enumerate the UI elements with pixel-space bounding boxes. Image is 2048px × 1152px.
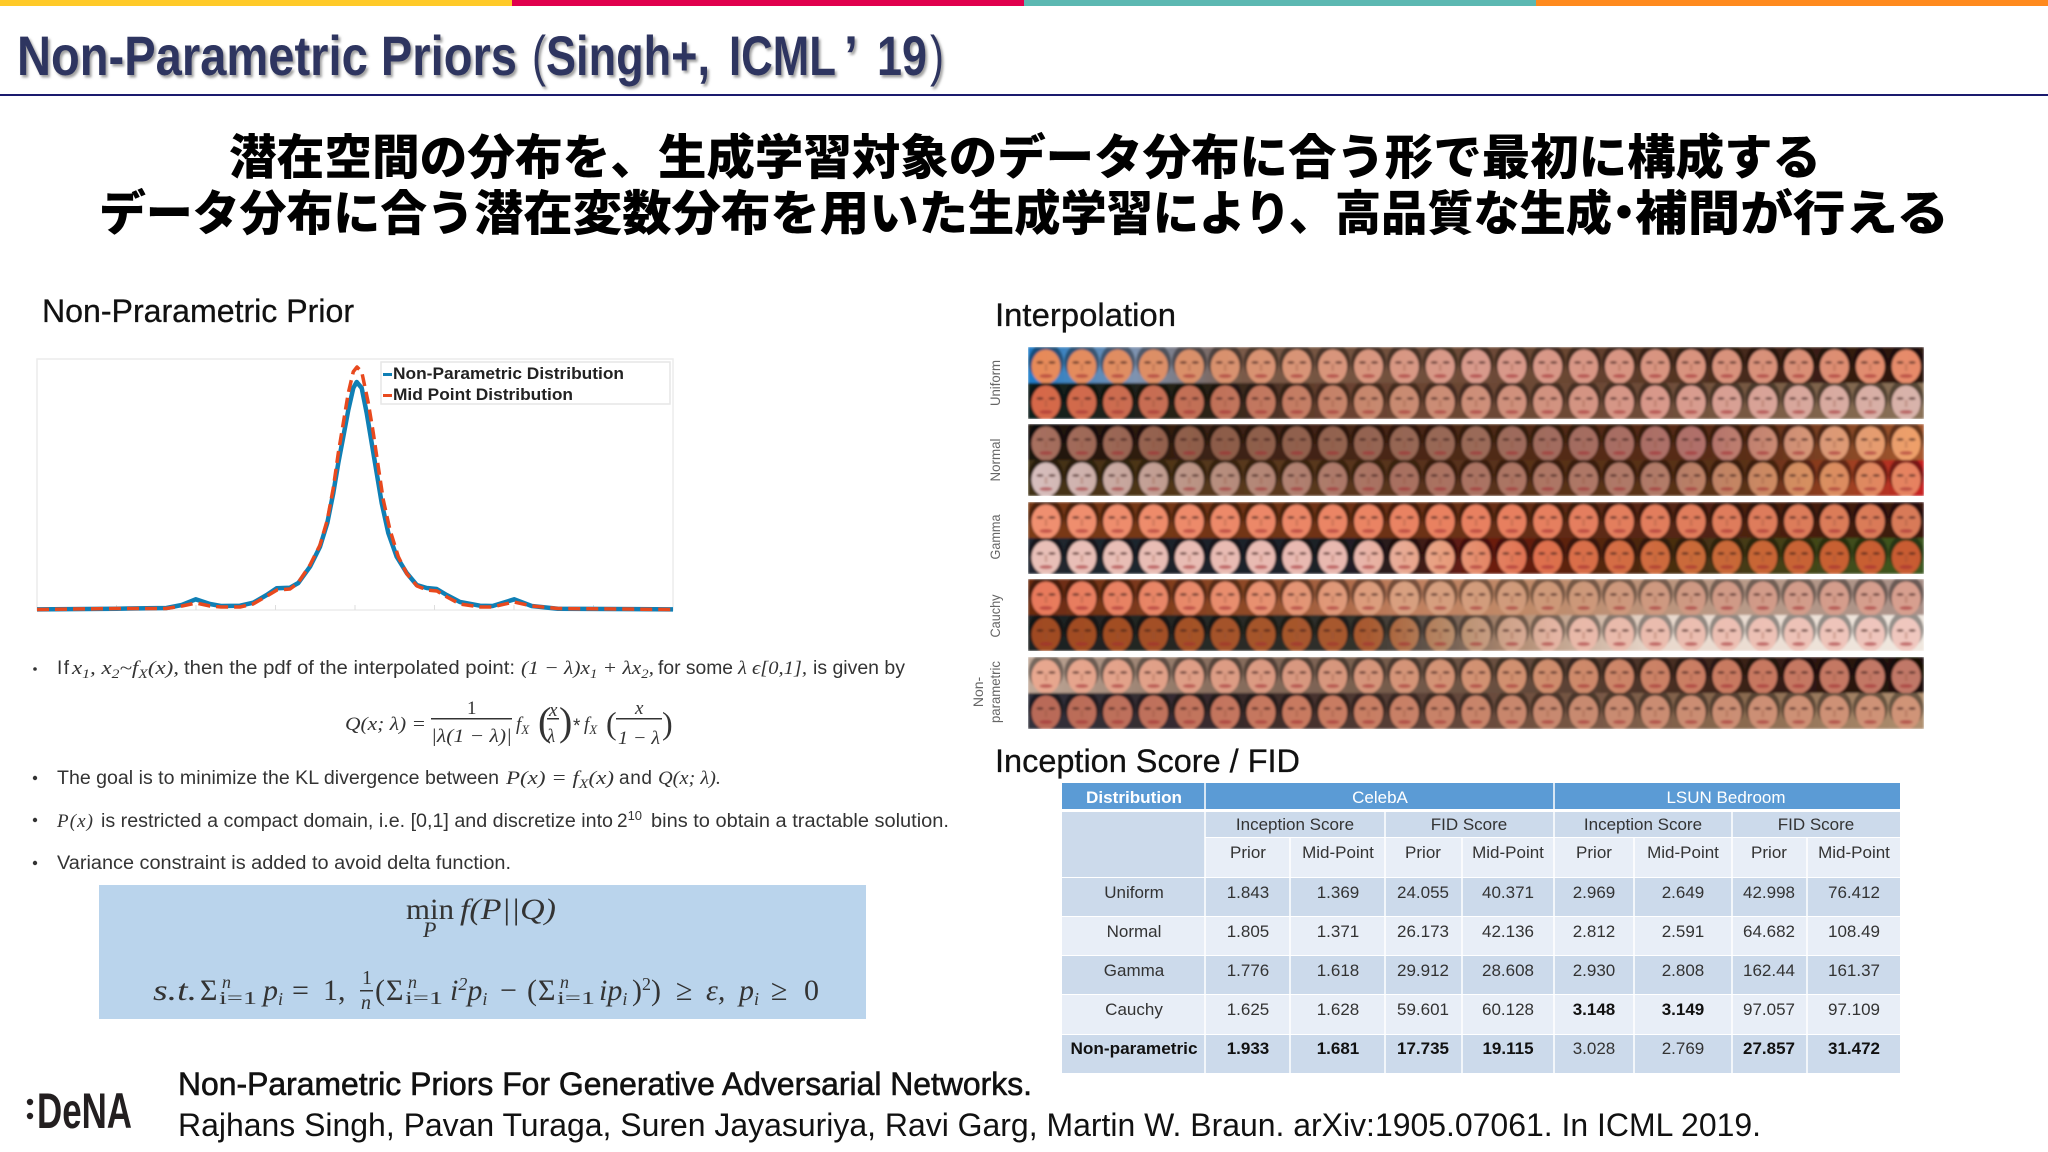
row: cauchy: 59.601 [1397,1000,1449,1019]
logo: DeNA: DeNA [37,1083,132,1139]
column sub-headers: Prior [1576,843,1612,862]
headline message: 生成学習により、 [968,187,1335,241]
bullet 1: ~f [119,658,142,679]
constraints: ip [599,974,622,1007]
headline message [99,131,1949,241]
row: normal: Normal [1107,922,1161,941]
row: normal: 1.371 [1317,922,1359,941]
constraints: ε, [706,974,725,1007]
formula panel: optimisation problem [99,885,866,1019]
column sub-headers: Prior [1751,843,1787,862]
column group headers [1236,815,1854,834]
column sub-headers: Prior [1405,843,1441,862]
top colour bar [0,0,2048,6]
row labels: priors [970,360,1003,723]
bullet 1: is given by [813,658,905,679]
row: gamma [1104,961,1880,980]
bullet list: explanation [33,658,949,874]
bullet 2: (x) [589,768,614,789]
row: gamma: 29.912 [1397,961,1449,980]
bullet 1: 2 [641,666,649,681]
row: normal: 2.591 [1662,922,1704,941]
chart legend: Non-Parametric Distribution [393,364,624,383]
slide title: ICML [729,24,836,87]
table backgrounds [1062,783,1900,1073]
constraints: i [754,989,759,1009]
bullet 3: 10 [628,808,642,823]
column sub-headers: Mid-Point [1472,843,1544,862]
heading: non-parametric prior: Non-Prarametric Prior [42,293,354,329]
bullet 1: then the pdf of the interpolated point: [184,658,515,679]
constraints: − [500,974,517,1007]
objective [406,893,556,942]
row: gamma: 2.930 [1573,961,1615,980]
row: normal [1107,922,1880,941]
row: non-parametric [1070,1039,1880,1058]
row labels: priors: Gamma [987,514,1003,560]
slide title: ( [532,24,546,87]
constraints: ( [527,974,537,1007]
constraints [153,967,819,1014]
slide title: ’ [844,24,858,87]
heading: inception score / FID: Inception Score / FID [995,743,1300,779]
row: normal: 108.49 [1828,922,1880,941]
constraints: n [560,972,569,992]
row: uniform: 1.369 [1317,883,1359,902]
headline message: 高品質な生成 [1335,187,1612,241]
bullet 1: 2 [112,666,120,681]
face strip: uniform [1028,347,1924,419]
constraints: i=1 [557,988,595,1008]
constraints: p [465,974,482,1007]
row labels: priors: Cauchy [987,594,1003,638]
formula: Q(x; lambda): x [548,700,558,721]
row: cauchy [1105,1000,1880,1019]
row: non-parametric: 31.472 [1828,1039,1880,1058]
bullet 2: and [619,768,652,789]
constraints: = [292,974,309,1007]
citation: Rajhans Singh, Pavan Turaga, Suren Jayasuriya, Ravi Garg, Martin W. Braun. arXiv:1905.07061. In ICML 2019. [178,1107,1761,1143]
logo: DeNA [27,1083,132,1139]
bullet 1: (1 − λ)x [521,658,582,679]
constraints: Σ [538,974,555,1007]
table header: CelebA [1352,788,1409,807]
bullet 1: , [649,658,654,679]
bullet 1: + λx [597,658,642,679]
constraints: i [278,989,283,1009]
formula: Q(x; lambda): X [588,722,598,737]
row: gamma: 161.37 [1828,961,1880,980]
formula: Q(x; lambda): ( [606,705,617,741]
row: cauchy: 3.148 [1573,1000,1615,1019]
constraints: ( [375,974,385,1007]
slide title [17,24,944,87]
constraints: Σ [386,974,403,1007]
formula: Q(x; lambda) [345,698,673,749]
constraints: n [361,992,371,1014]
line chart: distributions [37,359,673,610]
slide title: Non-Parametric Priors [17,24,517,87]
bullet 1: , x [90,658,112,679]
row: normal: 42.136 [1482,922,1534,941]
bullet 1: for some [658,658,733,679]
citation [178,1066,1761,1143]
headline message: 潜在空間の分布を、 [229,132,658,185]
curve: non-parametric distribution [37,382,673,609]
bullet 1 [57,658,905,681]
constraints: i=1 [405,988,443,1008]
row: non-parametric: 27.857 [1743,1039,1795,1058]
constraints: 2 [458,974,467,994]
results table [1062,783,1900,1073]
row: uniform: 42.998 [1743,883,1795,902]
bullet 2: Q(x; λ). [658,768,721,789]
constraints: ) [651,974,661,1007]
formula: Q(x; lambda): ) [559,699,572,744]
row: cauchy: Cauchy [1105,1000,1163,1019]
image grid: face interpolation [1028,347,1924,729]
row: uniform: 40.371 [1482,883,1534,902]
headline message: 補間が行える [1635,187,1949,241]
row: gamma: 2.808 [1662,961,1704,980]
row labels: priors: Uniform [987,360,1003,406]
row: cauchy: 60.128 [1482,1000,1534,1019]
row: normal: 64.682 [1743,922,1795,941]
row: uniform: Uniform [1104,883,1164,902]
face strip: normal [1028,424,1924,496]
formula: Q(x; lambda): f [516,714,521,735]
row labels: priors: Non- [970,676,986,707]
face strip: gamma [1028,502,1924,574]
row: non-parametric: 2.769 [1662,1039,1704,1058]
table header [1086,788,1786,807]
row: cauchy: 1.628 [1317,1000,1359,1019]
citation: Non-Parametric Priors For Generative Adversarial Networks. [178,1066,1032,1102]
bullet 1: (x), [148,658,179,679]
bullet 1: X [137,666,149,681]
row: uniform: 24.055 [1397,883,1449,902]
formula: Q(x; lambda): |λ(1 − λ)| [431,726,512,747]
table header: Distribution [1086,788,1182,807]
row: non-parametric: 1.933 [1227,1039,1269,1058]
bullet 4: Variance constraint is added to avoid delta function. [57,853,511,874]
row: cauchy: 97.057 [1743,1000,1795,1019]
table header: LSUN Bedroom [1666,788,1786,807]
row: normal: 1.805 [1227,922,1269,941]
constraints: s.t. [153,974,197,1007]
row: uniform: 2.969 [1573,883,1615,902]
chart legend: Mid Point Distribution [393,385,573,404]
formula: Q(x; lambda): f [584,714,589,735]
formula: Q(x; lambda): 1 − λ [618,728,660,749]
bullet 2: P(x) = f [506,768,566,789]
column sub-headers: Prior [1230,843,1266,862]
row: uniform: 1.843 [1227,883,1269,902]
formula: Q(x; lambda): ) [662,705,673,741]
row: gamma: 162.44 [1743,961,1795,980]
bullet 2: X [578,776,590,791]
row labels: priors: parametric [987,661,1003,723]
face strip: cauchy [1028,579,1924,651]
slide title: 19 [877,24,927,87]
slide title: Singh+, [546,24,710,87]
row: normal: 2.812 [1573,922,1615,941]
bullet 2: The goal is to minimize the KL divergence between [57,768,499,789]
constraints: p [263,974,278,1007]
bullet 3: P(x) [56,811,93,832]
row: gamma: Gamma [1104,961,1165,980]
formula: Q(x; lambda): X [520,722,530,737]
row: uniform: 2.649 [1662,883,1704,902]
formula: Q(x; lambda): λ [546,726,555,747]
row: gamma: 28.608 [1482,961,1534,980]
headline message: 生成学習対象のデータ分布に合う形で最初に構成する [658,131,1821,185]
objective: f(P||Q) [460,893,556,926]
curve: mid point distribution [37,367,673,610]
column sub-headers: Mid-Point [1647,843,1719,862]
formula: Q(x; lambda): x [634,698,644,719]
column sub-headers: Mid-Point [1818,843,1890,862]
row: normal: 26.173 [1397,922,1449,941]
column sub-headers: Mid-Point [1302,843,1374,862]
constraints: Σ [200,974,217,1007]
bullet 3: 2 [617,811,628,832]
constraints: i [622,989,627,1009]
constraints: 1 [362,967,372,989]
row: non-parametric: 17.735 [1397,1039,1449,1058]
column sub-headers [1230,843,1890,862]
slide title: ) [930,24,944,87]
row: non-parametric: 3.028 [1573,1039,1615,1058]
column group headers: FID Score [1778,815,1854,834]
constraints: ≥ [676,974,692,1007]
bullet 3: bins to obtain a tractable solution. [651,811,949,832]
heading: interpolation: Interpolation [995,297,1176,333]
bullet 3 [56,808,949,832]
constraints: i [450,974,458,1007]
chart legend [381,362,670,404]
constraints: n [222,972,231,992]
row: non-parametric: Non-parametric [1070,1039,1198,1058]
headline message: ・ [1600,188,1648,241]
formula: Q(x; lambda): 1 [467,698,476,719]
constraints: i [482,989,487,1009]
headline message: 潜在変数分布を用いた [474,188,968,241]
formula: Q(x; lambda): Q(x; λ) = [345,714,426,735]
column group headers: Inception Score [1236,815,1354,834]
row: cauchy: 3.149 [1662,1000,1704,1019]
row labels: priors: Normal [987,438,1003,482]
constraints: 0 [804,974,819,1007]
column group headers: FID Score [1431,815,1507,834]
bullet 3: is restricted a compact domain, i.e. [0,1] and discretize into [101,811,613,832]
formula: Q(x; lambda): * [573,716,581,737]
row: uniform: 76.412 [1828,883,1880,902]
constraints: p [739,974,754,1007]
bullet 1: x [72,658,80,679]
row: uniform [1104,883,1880,902]
row: cauchy: 97.109 [1828,1000,1880,1019]
constraints: ≥ [771,974,787,1007]
bullet 2 [57,768,721,791]
constraints: ) [632,974,642,1007]
formula: Q(x; lambda): ( [538,699,551,744]
bullet 1: λ ϵ[0,1], [737,658,807,679]
row: gamma: 1.618 [1317,961,1359,980]
constraints: 2 [642,974,651,994]
row: non-parametric: 1.681 [1317,1039,1359,1058]
constraints: i=1 [219,988,257,1008]
bullet 1: 1 [590,666,597,681]
headline message: データ分布に合う [99,187,474,241]
objective: P [422,917,436,942]
constraints: n [408,972,417,992]
bullet 1: If [57,658,70,679]
face strip: non-parametric [1028,657,1924,729]
objective: min [406,893,454,926]
row: non-parametric: 19.115 [1482,1039,1534,1058]
constraints: 1, [323,974,346,1007]
row: gamma: 1.776 [1227,961,1269,980]
row: cauchy: 1.625 [1227,1000,1269,1019]
column group headers: Inception Score [1584,815,1702,834]
bullet 1: 1 [82,666,90,681]
